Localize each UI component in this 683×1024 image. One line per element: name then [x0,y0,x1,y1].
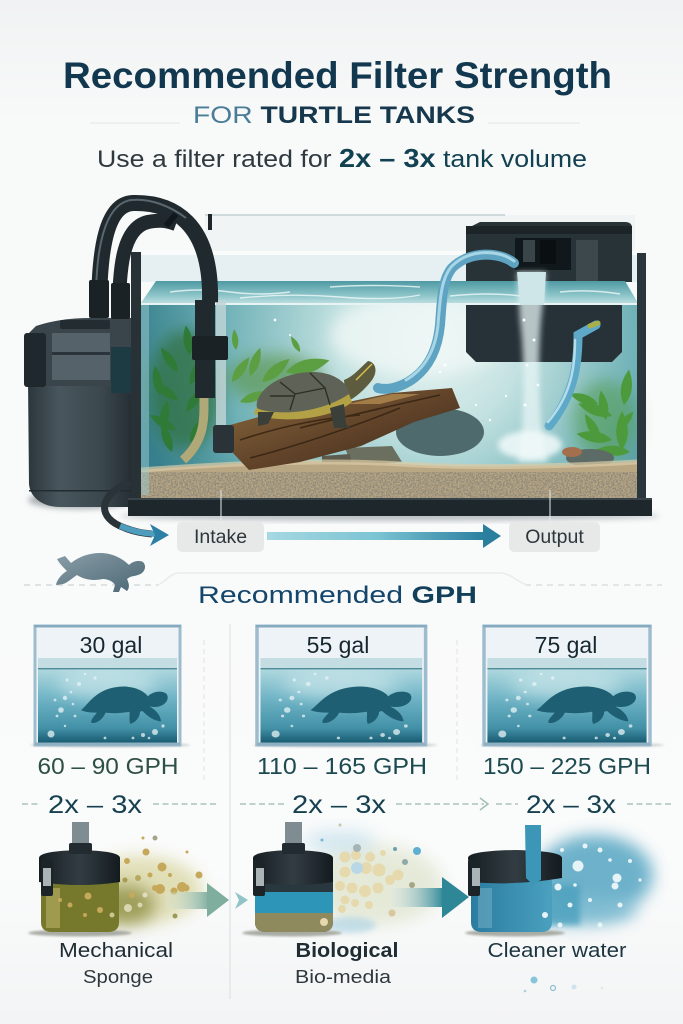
caption: mechanical: Sponge [83,966,153,987]
subtitle: for turtle tanks: FOR TURTLE TANKS [193,102,475,129]
label: intake [177,522,264,552]
canister filter [24,318,132,509]
icon: turtle silhouette [56,553,145,592]
gravel [141,462,637,498]
heading: recommended GPH: Recommended GPH [198,582,477,609]
illustration: aquarium with canister filter [24,200,660,552]
label line: intake [220,490,222,522]
stage: mechanical filter [28,822,229,936]
lid [468,850,562,883]
pipe [72,822,89,852]
panel: 75 gallon tank [480,625,664,779]
multiplier row: 2x-3x: 2x – 3x [48,791,143,819]
caption: biological: Bio-media [295,966,392,987]
particles [58,836,202,918]
label line: output [549,490,551,522]
intake pipe [183,300,234,460]
canister body with clean water [471,880,552,932]
panel: 30 gallon tank [30,625,190,779]
dividers [204,624,457,999]
caption: biological: Biological [296,940,398,962]
tank label: 55 gal: 55 gal [307,632,369,658]
aquarium back glass [141,214,639,282]
blue tubes [378,253,598,426]
caption: mechanical [59,940,173,987]
tank illustration: 55 gal [256,625,427,746]
flow rate: 110-165 GPH: 110 – 165 GPH [257,753,427,779]
bio-media pebbles [320,824,421,926]
stage: cleaner water [465,825,653,936]
chevron arrow [235,892,248,909]
multiplier row: 2x-3x: 2x – 3x [526,791,617,819]
caption: mechanical: Mechanical [59,940,173,962]
lid [39,850,120,885]
caption: cleaner water: Cleaner water [488,940,627,962]
tank illustration: 30 gal [34,625,181,746]
arrow [165,883,229,917]
flow rate: 150-225 GPH: 150 – 225 GPH [483,753,651,779]
label: output [509,522,600,552]
tank illustration: 75 gal [483,625,651,746]
lid [253,850,333,885]
label: intake: Intake [194,526,247,548]
drain hose with arrow [105,482,169,546]
multiplier row: 2x-3x [22,791,672,819]
section divider with turtle icon [24,553,662,592]
flow rate: 60-90 GPH: 60 – 90 GPH [38,753,178,779]
tank label: 30 gal: 30 gal [80,632,142,658]
turtle [254,361,375,428]
rocks [322,408,614,468]
aquarium water [141,295,637,478]
multiplier row: 2x-3x: 2x – 3x [292,791,387,819]
water droplets [524,976,603,992]
bubbles [542,844,642,928]
stage: biological filter [242,822,469,936]
arrow [392,877,469,918]
hang-on-back filter [466,222,632,362]
caption: biological [295,940,398,987]
pipe [285,822,302,852]
waterfall [274,272,562,462]
tank label: 75 gal: 75 gal [535,632,597,658]
canister body with sponge [41,880,119,932]
arrow: intake to output [267,524,501,548]
plants: left [148,325,331,454]
label: output: Output [525,526,584,548]
panel: 55 gallon tank [253,625,437,779]
tagline: filter rating: Use a filter rated for 2x – 3x tank volume [97,143,587,173]
canister body with bio-media [255,880,333,932]
tank frame [128,252,652,516]
driftwood [230,388,460,470]
falling water [525,825,541,884]
hoses [89,200,210,319]
title: Recommended Filter Strength [63,55,612,96]
water surface [141,281,638,305]
plants: right [568,369,637,460]
